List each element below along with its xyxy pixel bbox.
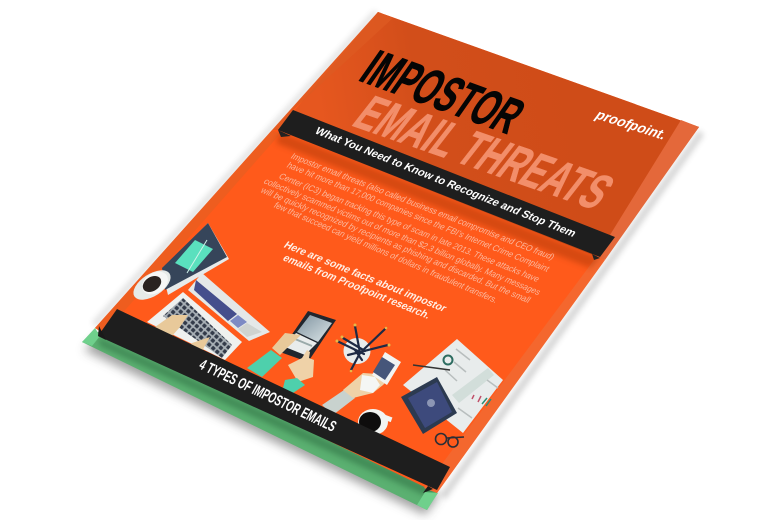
ribbon text: What You Need to Know to Recognize and Stop Them bbox=[312, 126, 578, 239]
pen bbox=[413, 365, 450, 370]
illustration: phone in hand bbox=[322, 352, 401, 415]
body paragraph: will be quickly recognized by recipients as phishing and discarded. But the small bbox=[258, 185, 533, 305]
illustration: notebook and coffee bbox=[128, 223, 229, 306]
ribbon: bottom banner bbox=[98, 309, 450, 493]
banner fold left bbox=[98, 326, 106, 340]
infographic brochure mockup bbox=[81, 10, 704, 520]
green corner left bbox=[82, 328, 100, 346]
report details bbox=[452, 368, 494, 403]
tablet bbox=[401, 377, 457, 434]
ribbon shadow bbox=[276, 132, 600, 268]
ribbon: subtitle bbox=[278, 110, 615, 260]
bold intro text: emails from Proofpoint research. bbox=[280, 253, 433, 321]
right band lower bbox=[424, 256, 605, 493]
teal card bbox=[175, 240, 213, 272]
green corner right bbox=[417, 492, 438, 510]
banner fold right bbox=[423, 486, 433, 493]
right band upper bbox=[597, 120, 699, 260]
page: orange cover bbox=[95, 12, 699, 493]
illustration: tablet with hands bbox=[247, 311, 336, 393]
illustration: laptop with hands bbox=[147, 273, 270, 360]
top-left band bbox=[272, 12, 393, 130]
coffee cup bbox=[128, 264, 176, 306]
body paragraph: Center (IC3) began tracking this type of scam in late 2013. These attacks have bbox=[277, 172, 542, 284]
ribbon fold right bbox=[592, 254, 600, 260]
left sleeve bbox=[247, 350, 282, 377]
body paragraph: have hit more than 17,000 companies since the FBI’s Internet Crime Complaint bbox=[285, 161, 552, 274]
ribbon fold left bbox=[278, 130, 291, 137]
bold intro text: Here are some facts about impostor bbox=[281, 240, 449, 315]
right hand bbox=[288, 350, 314, 382]
logo: proofpoint: proofpoint. bbox=[592, 108, 671, 143]
illustration: papers, tablet, pen, glasses bbox=[401, 339, 503, 447]
back cover: green bbox=[82, 328, 438, 510]
body paragraph: Impostor email threats (also called business email compromise and CEO fraud) bbox=[289, 152, 557, 262]
drop shadow bbox=[84, 10, 704, 515]
glasses bbox=[436, 434, 464, 447]
banner text: 4 TYPES OF IMPOSTOR EMAILS bbox=[196, 357, 339, 435]
upper darker header panel bbox=[278, 12, 699, 258]
lower-left edge band bbox=[95, 130, 280, 334]
body paragraph: few that succeed can yield millions of dollars in fraudulent transfers. bbox=[272, 201, 500, 305]
illustration: bottom coffee cup bbox=[358, 409, 392, 435]
hands bbox=[155, 315, 188, 336]
illustration: pencils in holder bbox=[336, 324, 390, 372]
body paragraph: collectively scammed victims out of more than $2.3 billion globally. Many messages bbox=[262, 177, 543, 297]
title: IMPOSTOR: IMPOSTOR bbox=[350, 41, 535, 144]
